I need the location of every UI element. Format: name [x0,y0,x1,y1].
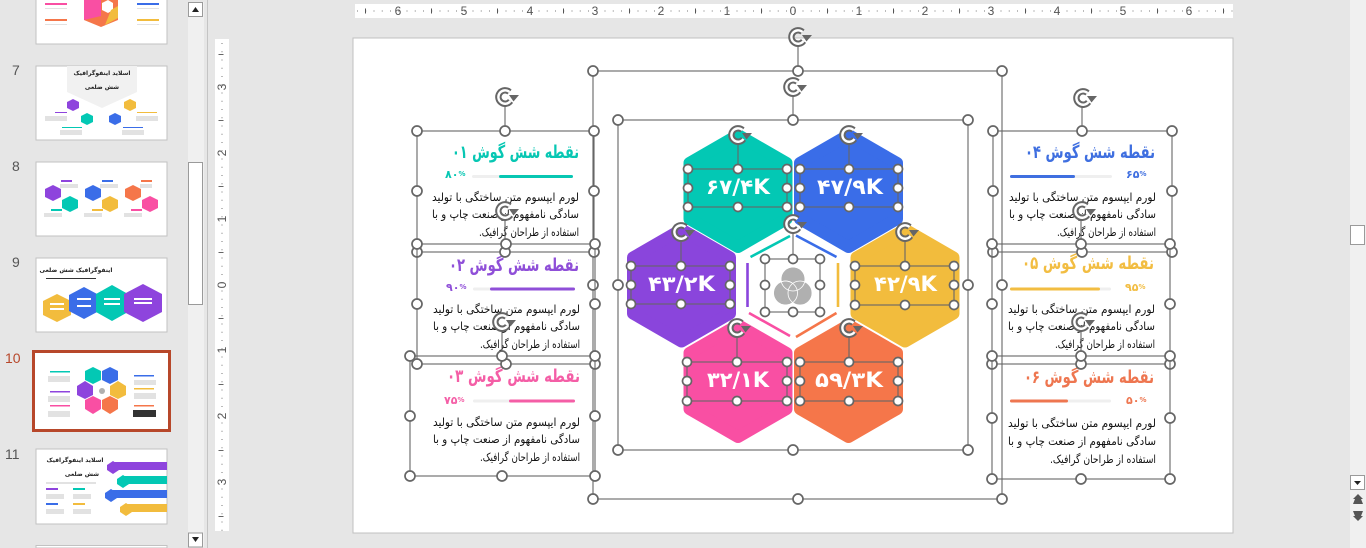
thumbnail 11: اسلاید اینفوگرافیک [47,456,103,464]
body text 04: استفاده از طراحان گرافیک. [1057,225,1156,240]
horizontal ruler: 5 [1120,4,1127,18]
vertical ruler [215,39,229,531]
vertical ruler: 2 [215,412,229,419]
percent 80: % [458,170,465,178]
thumbnail 7: 7 [12,62,20,78]
heading 02: نقطه شش گوش ۰۲ [449,254,579,276]
body text 01: استفاده از طراحان گرافیک. [479,225,579,240]
body text 04: لورم ایپسوم متن ساختگی با تولید [1009,190,1156,205]
hexagon: purple 43.2K [633,230,730,342]
horizontal ruler: 4 [527,4,534,18]
thumbnail 6 [36,0,167,44]
panel: point 03 [433,365,580,465]
heading 06: نقطه شش گوش ۰۶ [1024,366,1154,388]
horizontal ruler: 2 [658,4,665,18]
hexagon: blue 47.9K [800,135,897,247]
horizontal ruler: 6 [395,4,402,18]
selection: blue value box [796,128,902,212]
left scrollbar [188,0,208,548]
thumbnail 9: اینفوگرافیک شش ضلعی [40,266,112,274]
horizontal ruler: 2 [922,4,929,18]
progress bar 75% [473,400,575,402]
vertical ruler: 3 [215,478,229,485]
horizontal ruler: 5 [461,4,468,18]
body text 06: استفاده از طراحان گرافیک. [1050,452,1156,467]
horizontal ruler: 1 [724,4,731,18]
body text 04: سادگی نامفهوم از صنعت چاپ و با [1009,207,1156,222]
body text 03 [433,415,580,465]
panel: slide thumbnails [5,0,170,548]
hexagon: orange 59.3K: ۵۹/۳K [815,368,884,392]
centre hexagon outline [748,236,838,337]
selection: hexagon group box [613,80,973,455]
selection: pink value box [682,321,792,406]
selection: text box 06 [987,315,1175,484]
thumbnail 11: شش ضلعی [65,471,99,478]
selection: text box 05 [987,204,1175,369]
heading 04: نقطه شش گوش ۰۴ [1025,141,1155,163]
progress bar 95% [1010,288,1111,290]
panel: point 02 [433,254,580,352]
heading 01: نقطه شش گوش ۰۱ [452,141,579,163]
percent 50: ۵۰ [1126,394,1139,407]
selection: text box 04 [988,91,1177,257]
progress bar 50% [1010,400,1111,402]
percent 65: ۶۵ [1126,168,1139,181]
heading 05: نقطه شش گوش ۰۵ [1022,252,1154,274]
vertical ruler: 3 [215,83,229,90]
vertical ruler: 2 [215,149,229,156]
progress bar 90% [473,288,575,290]
body text 01: لورم ایپسوم متن ساختگی با تولید [432,190,579,205]
selection: purple value box [626,225,734,308]
hexagon: purple 43.2K: ۴۳/۲K [648,272,716,296]
body text 06: سادگی نامفهوم از صنعت چاپ و با [1008,434,1156,449]
percent 90: % [459,283,466,291]
body text 04 [1009,190,1156,240]
horizontal ruler: 4 [1054,4,1061,18]
hexagon chart [633,135,954,437]
thumbnail 7: اسلاید اینفوگرافیک [74,69,130,77]
horizontal ruler: 6 [1186,4,1193,18]
horizontal ruler [355,4,1233,18]
horizontal ruler: 3 [592,4,599,18]
right scrollbar [1350,0,1366,548]
hexagon: pink 32.1K [690,325,786,437]
selection: centre icon box [760,217,824,316]
body text 01: سادگی نامفهوم از صنعت چاپ و با [432,207,579,222]
horizontal ruler: 3 [988,4,995,18]
body text 02: لورم ایپسوم متن ساختگی با تولید [433,302,580,317]
selection: outer group box [588,30,1007,504]
body text 06: لورم ایپسوم متن ساختگی با تولید [1008,416,1156,431]
body text 02: سادگی نامفهوم از صنعت چاپ و با [433,319,580,334]
percent 75: ۷۵ [444,394,457,407]
body text 02: استفاده از طراحان گرافیک. [480,337,580,352]
progress bar 65% [1010,175,1112,178]
thumbnail 7: شش ضلعی [85,84,119,91]
percent 50: % [1139,396,1146,404]
percent 75: % [457,396,464,404]
body text 03: استفاده از طراحان گرافیک. [480,450,580,465]
panel: point 05 [1008,252,1155,352]
panel: point 06 [1008,366,1156,467]
thumbnail 11 [5,446,167,524]
percent 90: ۹۰ [446,281,459,294]
percent 95: ۹۵ [1125,281,1138,294]
body text 03: سادگی نامفهوم از صنعت چاپ و با [433,432,580,447]
body text 02 [433,302,580,352]
percent 80: ۸۰ [445,168,458,181]
hexagon: blue 47.9K: ۴۷/۹K [817,175,884,199]
horizontal ruler: 1 [856,4,863,18]
thumbnail 12 [36,546,167,548]
percent 95: % [1138,283,1145,291]
body text 05: لورم ایپسوم متن ساختگی با تولید [1008,302,1155,317]
thumbnail 10 (selected) [5,350,170,430]
horizontal ruler: 0 [790,4,797,18]
selection: teal value box [684,128,792,212]
thumbnail 8: 8 [12,158,20,174]
selection: text box 02 [412,204,600,369]
progress bar 80% [472,175,573,178]
hexagon: yellow 42.9K: ۴۲/۹K [874,272,938,296]
selection: text box 03 [405,315,600,481]
body text 01 [432,190,579,240]
vertical ruler: 1 [215,215,229,222]
panel: slide canvas [353,38,1233,533]
selection: text box 01 [412,90,599,257]
body text 05: سادگی نامفهوم از صنعت چاپ و با [1008,319,1155,334]
panel: point 04 [1009,141,1156,240]
thumbnail 9: 9 [12,254,20,270]
body text 03: لورم ایپسوم متن ساختگی با تولید [433,415,580,430]
body text 06 [1008,416,1156,467]
hexagon: pink 32.1K: ۳۲/۱K [707,368,770,392]
vertical ruler: 0 [215,281,229,288]
body text 05 [1008,302,1155,352]
percent 65: % [1139,170,1146,178]
hexagon: yellow 42.9K [856,230,954,342]
thumbnail 10 (selected): 10 [5,350,21,366]
hexagon: teal 67.4K: ۶۷/۴K [706,175,771,199]
panel: point 01 [432,141,579,240]
hexagon: teal 67.4K [690,135,786,247]
vertical ruler: 1 [215,346,229,353]
body text 05: استفاده از طراحان گرافیک. [1055,337,1155,352]
selection: orange value box [796,321,902,406]
icon: three overlapping circles [774,267,812,305]
thumbnail 7 [12,62,167,140]
selection: yellow value box [850,225,958,310]
hexagon: orange 59.3K [800,325,897,437]
thumbnail 11: 11 [5,446,20,462]
heading 03: نقطه شش گوش ۰۳ [447,365,580,387]
thumbnail 9 [12,254,167,332]
thumbnail 8 [12,158,167,236]
